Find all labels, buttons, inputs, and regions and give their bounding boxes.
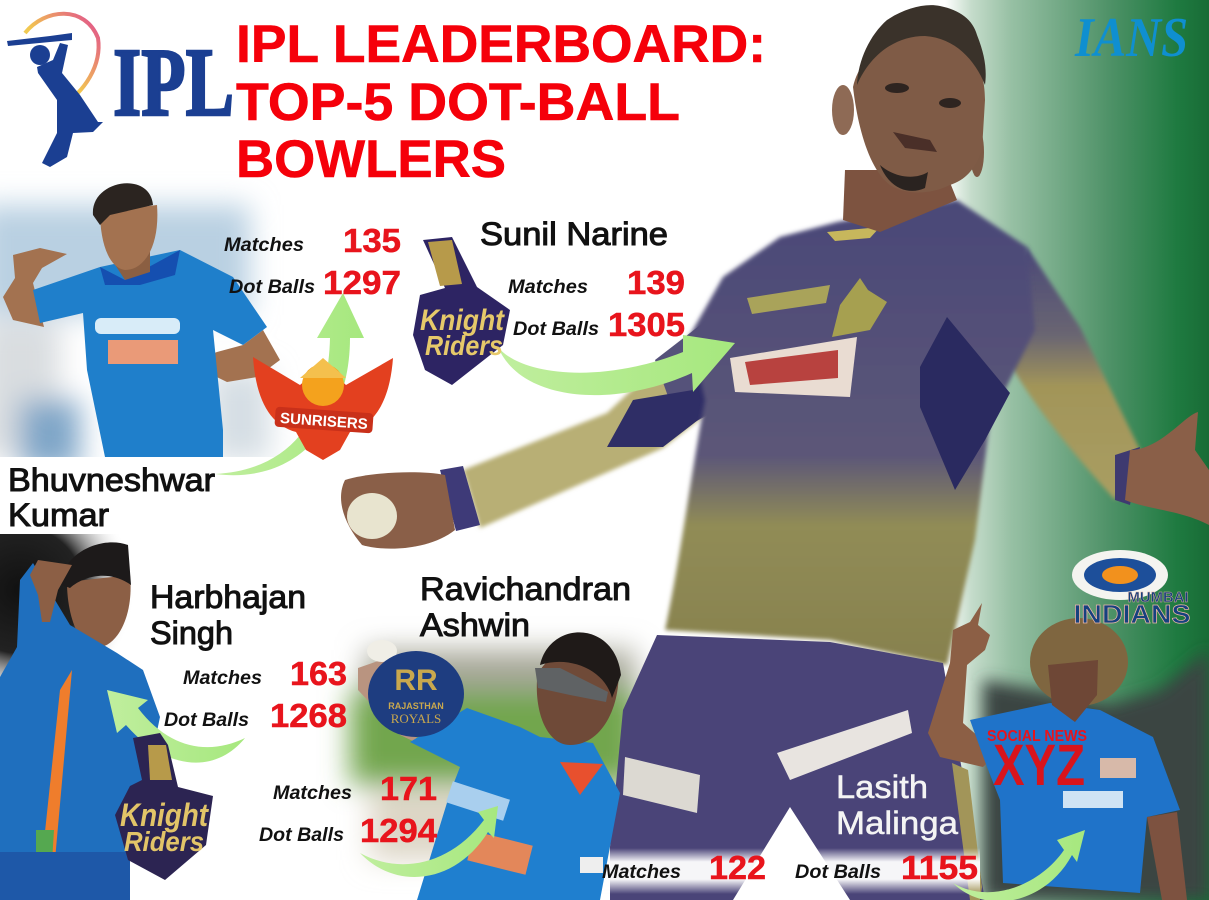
- logo: Kolkata Knight Riders (top): Knight: [420, 304, 506, 337]
- torso: [665, 200, 1035, 665]
- soft background behind Ashwin: [350, 650, 640, 860]
- watermark: Social News XYZ: XYZ: [993, 733, 1085, 798]
- IPL wordmark: IPL: [113, 29, 234, 137]
- dot balls stat: Dot Balls: [164, 710, 249, 731]
- matches stat: 135: [343, 222, 401, 259]
- dot balls stat: 1294: [360, 812, 438, 849]
- bowling arm: [358, 655, 430, 742]
- matches stat: Matches: [602, 862, 681, 883]
- hand: [30, 560, 72, 622]
- dot balls stat: [164, 697, 347, 734]
- logo: Sunrisers Hyderabad: [253, 357, 393, 460]
- ears: [832, 85, 854, 135]
- logo: Mumbai Indians: [1072, 550, 1190, 629]
- matches stat: [183, 655, 347, 692]
- player name: Bhuvneshwar: [8, 462, 215, 498]
- jersey: [33, 250, 267, 457]
- logo: Kolkata Knight Riders (bottom): [115, 733, 213, 880]
- dot balls stat: [259, 812, 438, 849]
- dot balls stat: Dot Balls: [513, 319, 599, 340]
- right arm: [990, 247, 1140, 500]
- matches stat: Matches: [273, 783, 352, 804]
- head: [100, 205, 157, 270]
- logo: IANS: IANS: [1074, 7, 1188, 69]
- player name: [150, 579, 306, 651]
- title: TOP-5 DOT-BALL: [236, 73, 680, 132]
- player name: Ravichandran: [420, 571, 631, 607]
- matches stat: 171: [380, 770, 437, 807]
- arrow: Narine: [498, 335, 735, 395]
- arrow: Malinga: [953, 830, 1085, 900]
- shorts: [610, 635, 985, 900]
- player photo: Bhuvneshwar Kumar: [3, 183, 280, 457]
- player name: [420, 571, 631, 643]
- neck: [843, 170, 957, 232]
- green background panel: [945, 0, 1209, 900]
- title: BOWLERS: [236, 130, 506, 189]
- player name: Sunil Narine: [480, 216, 668, 252]
- left arm: [3, 248, 67, 327]
- head: [853, 35, 985, 192]
- logos on the shirt: [730, 337, 857, 397]
- left arm: [463, 335, 737, 528]
- panel: Sunil Narine: [480, 216, 685, 343]
- raised arm: [928, 603, 997, 767]
- jersey: [970, 703, 1180, 893]
- player photo: Ravichandran Ashwin: [358, 632, 621, 900]
- panel: Lasith Malinga: [602, 769, 978, 886]
- logo: Rajasthan Royals: ROYALS: [391, 711, 441, 726]
- logo: Kolkata Knight Riders (top): Riders: [425, 330, 503, 361]
- player photo: Sunil Narine: [341, 5, 1209, 900]
- logo: Rajasthan Royals: RR: [394, 664, 438, 697]
- player name: Kumar: [8, 497, 109, 533]
- head: [1030, 618, 1128, 706]
- matches stat: 139: [627, 264, 685, 301]
- dot balls stat: Dot Balls: [229, 277, 315, 298]
- neck: [115, 252, 150, 280]
- dot balls stat: Dot Balls: [259, 825, 344, 846]
- watermark: Social News XYZ: SOCIAL NEWS: [987, 728, 1087, 745]
- right arm: [1147, 812, 1187, 900]
- player name: Ashwin: [420, 607, 530, 643]
- logo: Mumbai Indians: MUMBAI: [1128, 589, 1188, 606]
- right arm: [215, 330, 280, 382]
- arrow: Bhuvneshwar: [215, 293, 364, 475]
- player photo: Harbhajan Singh: [0, 542, 160, 900]
- dot balls stat: 1305: [608, 306, 685, 343]
- dot balls stat: [795, 849, 978, 886]
- matches stat: 122: [709, 849, 766, 886]
- matches stat: 163: [290, 655, 347, 692]
- panel: Bhuvneshwar Kumar: [8, 222, 401, 533]
- title: IPL LEADERBOARD:: [236, 15, 766, 74]
- player name: Singh: [150, 615, 233, 651]
- logo: Kolkata Knight Riders (bottom): Riders: [124, 826, 204, 857]
- player photo: Lasith Malinga: [928, 603, 1187, 900]
- dot balls stat: 1297: [323, 264, 401, 301]
- player name: [836, 769, 958, 841]
- logo: Sunrisers Hyderabad: SUNRISERS: [279, 410, 368, 433]
- jersey: [410, 708, 620, 900]
- player name: Malinga: [836, 805, 958, 841]
- matches stat: [508, 264, 685, 301]
- matches stat: [273, 770, 437, 807]
- logo: Kolkata Knight Riders (top): [413, 237, 510, 385]
- dot balls stat: Dot Balls: [795, 862, 881, 883]
- player name: [8, 462, 215, 533]
- dot balls stat: [513, 306, 685, 343]
- jersey: [0, 563, 160, 900]
- matches stat: Matches: [224, 235, 304, 256]
- player name: Lasith: [836, 769, 928, 805]
- matches stat: Matches: [183, 668, 262, 689]
- logo: Rajasthan Royals: [368, 651, 464, 737]
- panel: Harbhajan Singh: [150, 579, 347, 734]
- matches stat: Matches: [508, 277, 588, 298]
- panel: Ravichandran Ashwin: [259, 571, 631, 849]
- head: [67, 575, 131, 648]
- dot balls stat: [229, 264, 401, 301]
- logo: Rajasthan Royals: RAJASTHAN: [388, 701, 444, 711]
- dot balls stat: 1268: [270, 697, 347, 734]
- logo: Mumbai Indians: INDIANS: [1074, 599, 1190, 629]
- logo: IPL: [7, 14, 234, 167]
- arrow: Ashwin: [360, 806, 498, 877]
- player name: Harbhajan: [150, 579, 306, 615]
- icon: batsman: [7, 14, 103, 167]
- soft background behind Bhuvneshwar: [0, 205, 270, 470]
- matches stat: [602, 849, 766, 886]
- dot balls stat: 1155: [901, 849, 978, 886]
- logo: Kolkata Knight Riders (bottom): Knight: [120, 797, 209, 833]
- white band behind bottom stats: [600, 848, 980, 894]
- arrow: Harbhajan: [107, 690, 245, 763]
- soft background behind Harbhajan: [0, 534, 113, 677]
- title: [236, 15, 766, 189]
- head: [537, 649, 619, 745]
- matches stat: [224, 222, 401, 259]
